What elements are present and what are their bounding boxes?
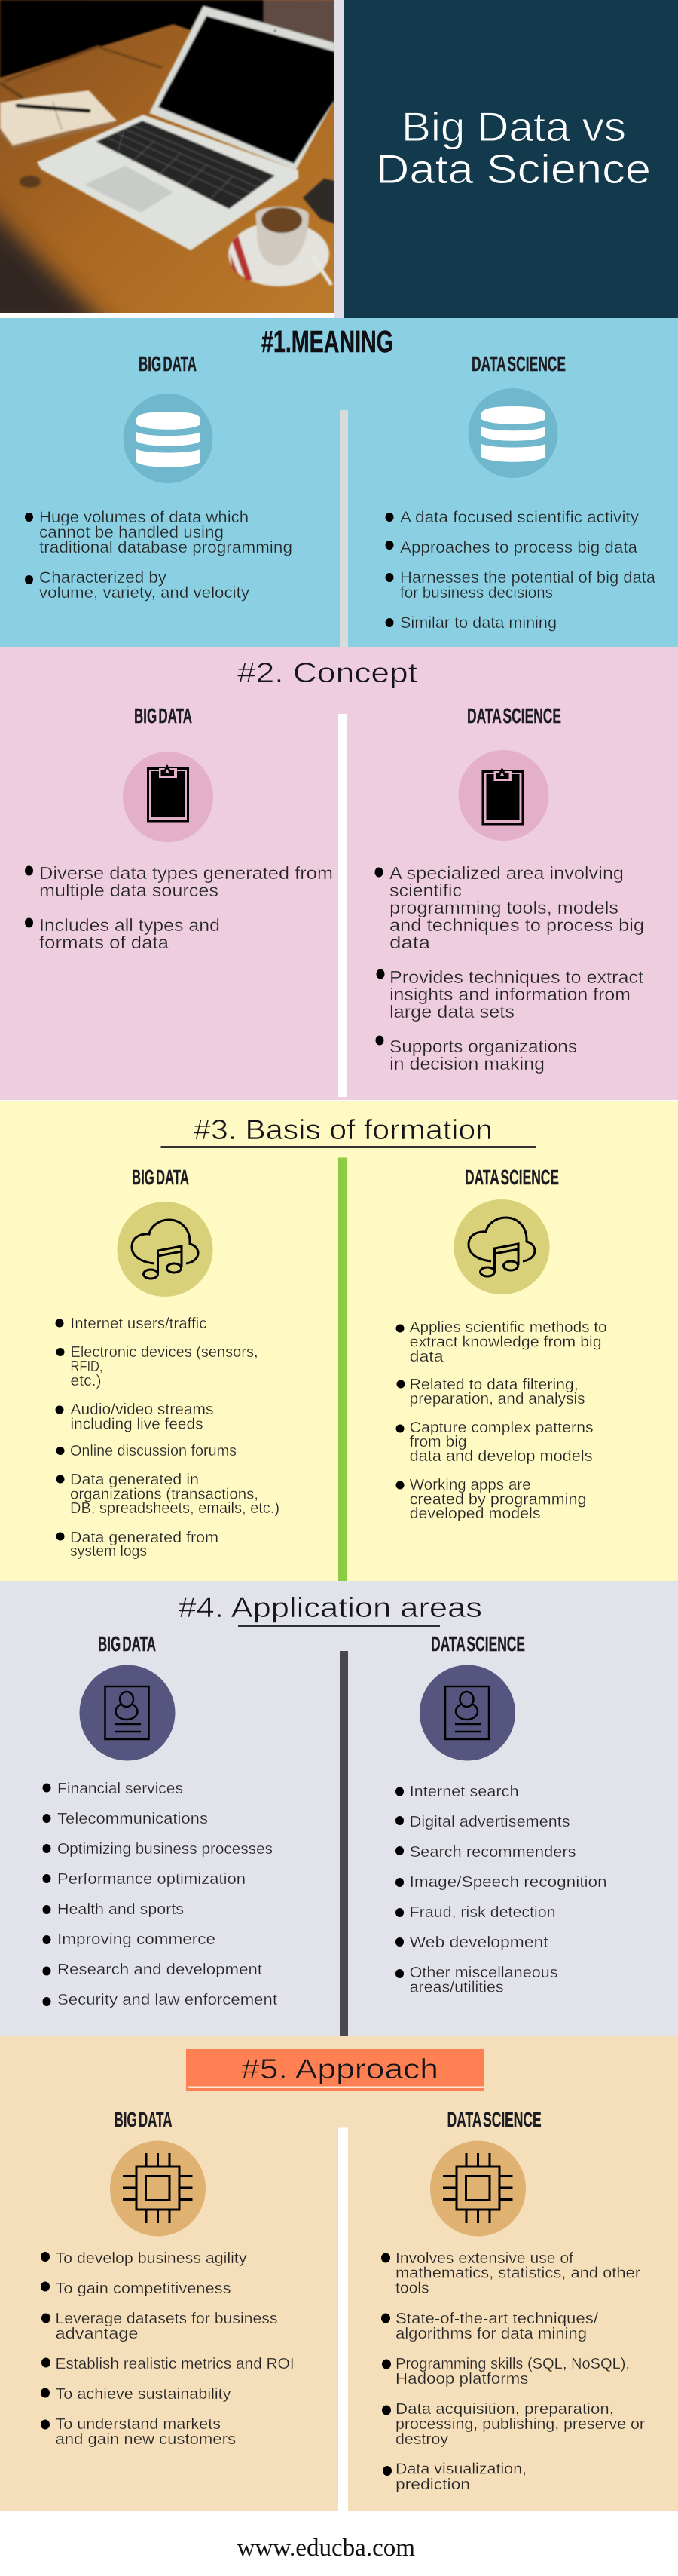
panel: #3 basis of formation — [0, 1101, 678, 1581]
icon: cloud with music note, big data — [118, 1202, 212, 1297]
icon: microchip, big data — [110, 2141, 206, 2236]
divider — [338, 714, 347, 1097]
bullet list: data science formation: developed models — [410, 1505, 541, 1522]
bullet list: big data concept — [25, 863, 333, 952]
bullet list: data science approach: State-of-the-art techniques/ — [396, 2311, 598, 2327]
bullet list: big data approach: Leverage datasets for business — [56, 2311, 277, 2327]
header photo: laptop on wooden desk — [0, 0, 334, 332]
bullet list: big data formation: system logs — [70, 1543, 147, 1560]
bullet list: data science formation: Related to data filtering, — [410, 1377, 579, 1393]
bullet list: data science applications: Digital advertisements — [410, 1814, 570, 1830]
bullet list: big data formation: including live feeds — [71, 1416, 203, 1432]
bullet list: data science approach: algorithms for data mining — [396, 2326, 587, 2342]
bullet list: data science formation — [396, 1319, 607, 1522]
icon: open notebook — [0, 90, 117, 149]
bullet list: data science concept — [375, 863, 644, 1074]
bullet list: data science approach: Involves extensive use of — [396, 2250, 573, 2267]
bullet list: data science approach: mathematics, statistics, and other — [396, 2265, 640, 2281]
column heading: big data: BIG DATA — [134, 704, 192, 727]
icon: cloud with music note, data science — [454, 1199, 550, 1294]
bullet list: big data approach: To develop business agility — [56, 2250, 247, 2267]
bullet list: data science approach: Data visualization, — [396, 2461, 527, 2477]
bullet list: big data formation: Audio/video streams — [71, 1401, 214, 1418]
bullet list: data science approach: prediction — [396, 2476, 470, 2493]
bullet list: big data concept: multiple data sources — [39, 881, 218, 900]
bullet list: data science approach — [381, 2250, 645, 2493]
bullet list: big data meaning: Characterized by — [39, 568, 166, 587]
bullet list: data science concept: large data sets — [389, 1002, 515, 1022]
bullet list: big data approach — [41, 2250, 294, 2448]
column heading: big data: BIG DATA — [139, 352, 197, 375]
heading underline — [161, 1146, 536, 1148]
bullet list: big data applications: Financial services — [57, 1781, 183, 1797]
title: Big Data vs — [402, 103, 626, 150]
bullet list: data science concept: insights and information from — [389, 985, 631, 1004]
bullet list: big data concept: Includes all types and — [39, 915, 220, 935]
bullet list: data science approach: processing, publishing, preserve or — [396, 2416, 645, 2433]
bullet list: big data approach: To gain competitiveness — [56, 2280, 231, 2297]
bullet list: big data approach: Establish realistic metrics and ROI — [56, 2356, 294, 2372]
bullet list: big data applications: Optimizing business processes — [57, 1841, 273, 1858]
bullet list: big data meaning: traditional database programming — [39, 538, 292, 556]
bullet list: data science concept: Provides techniques to extract — [389, 967, 644, 987]
divider — [340, 1651, 348, 2036]
bullet list: data science meaning: Similar to data mining — [400, 614, 557, 632]
bullet list: big data meaning: cannot be handled using — [39, 523, 224, 541]
bullet list: data science formation: Working apps are — [410, 1477, 531, 1493]
bullet list: data science concept: programming tools, models — [389, 898, 618, 917]
icon: microchip, data science — [430, 2141, 526, 2236]
bullet list: big data formation: Electronic devices (sensors, — [71, 1344, 258, 1361]
icon: phone — [303, 179, 334, 224]
bullet list: data science meaning — [386, 508, 655, 632]
bullet list: big data applications: Performance optimization — [57, 1871, 246, 1888]
icon: laptop — [37, 6, 334, 250]
column heading: data science: DATA SCIENCE — [467, 704, 561, 727]
bullet list: big data approach: advantage — [56, 2326, 139, 2342]
column heading: data science: DATA SCIENCE — [472, 352, 566, 375]
bullet list: big data meaning: Huge volumes of data which — [39, 508, 249, 526]
bullet list: big data formation: organizations (transactions, — [70, 1487, 258, 1503]
bullet list: data science formation: extract knowledge from big — [410, 1334, 602, 1351]
photo divider strip — [334, 0, 344, 318]
bullet list: big data formation: Internet users/traffic — [71, 1316, 206, 1332]
column heading: big data: BIG DATA — [132, 1165, 189, 1189]
icon: database, big data — [124, 394, 212, 483]
column heading: data science: DATA SCIENCE — [447, 2108, 542, 2131]
bullet list: data science formation: Applies scientific methods to — [410, 1319, 607, 1336]
divider — [338, 2127, 348, 2512]
bullet list: data science approach: destroy — [396, 2431, 448, 2448]
bullet list: data science meaning: Approaches to process big data — [400, 538, 637, 556]
bullet list: big data applications: Research and development — [57, 1962, 262, 1978]
bullet list: data science applications: Fraud, risk detection — [410, 1904, 556, 1921]
bullet list: data science approach: tools — [396, 2280, 429, 2296]
bullet list: data science concept: scientific — [389, 881, 462, 900]
bullet list: data science approach: Hadoop platforms — [396, 2371, 529, 2388]
divider — [340, 410, 348, 651]
bullet list: data science formation: created by programming — [410, 1491, 587, 1508]
bullet list: big data concept: Diverse data types generated from — [39, 863, 333, 883]
bullet list: big data concept: formats of data — [39, 933, 169, 952]
panel: #2 concept — [0, 647, 678, 1100]
panel: #1 meaning — [0, 318, 678, 651]
heading: #5. Approach: #5. Approach — [241, 2054, 438, 2084]
bullet list: data science meaning: Harnesses the potential of big data — [400, 568, 655, 587]
bullet list: data science applications: Other miscellaneous — [410, 1965, 558, 1981]
heading banner — [186, 2049, 484, 2091]
bullet list: big data formation: RFID, — [71, 1358, 102, 1375]
bullet list: data science applications — [396, 1784, 607, 1996]
bullet list: data science approach: Data acquisition, preparation, — [396, 2401, 614, 2418]
bullet list: data science concept: Supports organizations — [389, 1037, 577, 1056]
bullet list: data science concept: A specialized area involving — [389, 863, 624, 883]
column heading: big data: BIG DATA — [98, 1632, 156, 1656]
bullet list: big data applications: Health and sports — [57, 1901, 184, 1918]
bullet list: data science meaning: for business decisions — [400, 584, 553, 602]
title: Data Science — [376, 145, 651, 192]
bullet list: big data applications: Telecommunications — [57, 1811, 208, 1827]
column heading: big data: BIG DATA — [115, 2108, 172, 2131]
bullet list: big data applications: Improving commerce — [57, 1931, 215, 1948]
column heading: data science: DATA SCIENCE — [465, 1165, 559, 1189]
icon: clipboard, big data — [123, 752, 213, 842]
bullet list: data science formation: preparation, and analysis — [410, 1391, 585, 1407]
title panel — [344, 0, 678, 318]
icon: coffee cup on saucer — [228, 207, 331, 286]
bullet list: big data applications — [42, 1781, 277, 2008]
heading: #4. Application areas: #4. Application areas — [178, 1592, 482, 1623]
bullet list: data science concept: in decision making — [389, 1054, 545, 1074]
bullet list: data science applications: Image/Speech recognition — [410, 1874, 607, 1891]
bullet list: data science applications: Search recommenders — [410, 1844, 576, 1861]
bullet list: big data formation — [56, 1316, 279, 1560]
bullet list: data science concept: and techniques to process big — [389, 915, 644, 935]
title — [376, 103, 651, 192]
heading: #1. Meaning: #1.MEANING — [261, 324, 393, 359]
icon: profile card, big data — [80, 1665, 175, 1761]
bullet list: big data applications: Security and law enforcement — [57, 1992, 277, 2008]
bullet list: data science approach: Programming skills (SQL, NoSQL), — [396, 2356, 630, 2372]
bullet list: big data meaning: volume, variety, and velocity — [39, 584, 249, 602]
bullet list: big data meaning — [25, 508, 292, 602]
icon: database, data science — [469, 388, 557, 478]
bullet list: data science formation: from big — [410, 1434, 467, 1450]
bullet list: data science formation: data and develop models — [410, 1448, 593, 1465]
bullet list: data science formation: data — [410, 1349, 444, 1365]
icon: clipboard, data science — [458, 750, 548, 841]
bullet list: data science formation: Capture complex patterns — [410, 1420, 594, 1436]
icon: profile card, data science — [420, 1665, 515, 1761]
bullet list: big data formation: Data generated in — [70, 1472, 199, 1488]
heading underline — [238, 1625, 440, 1627]
heading: #2. Concept: #2. Concept — [237, 657, 418, 688]
bullet list: big data formation: Data generated from — [70, 1530, 218, 1546]
bullet list: big data approach: To achieve sustainability — [56, 2386, 231, 2403]
bullet list: data science applications: areas/utilities — [410, 1980, 504, 1996]
bullet list: big data formation: DB, spreadsheets, emails, etc.) — [70, 1500, 279, 1517]
bullet list: data science concept: data — [389, 933, 430, 952]
bullet list: big data formation: etc.) — [71, 1373, 101, 1389]
footer: website: www.educba.com — [237, 2535, 415, 2562]
column heading: data science: DATA SCIENCE — [431, 1632, 525, 1656]
panel: #4 application areas — [0, 1581, 678, 2036]
panel: #5 approach — [0, 2036, 678, 2512]
heading: #3. Basis of formation: #3. Basis of formation — [194, 1114, 493, 1145]
bullet list: data science applications: Internet search — [410, 1784, 519, 1800]
bullet list: big data formation: Online discussion forums — [70, 1443, 237, 1460]
divider — [338, 1158, 347, 1581]
bullet list: data science meaning: A data focused scientific activity — [400, 508, 639, 526]
bullet list: big data approach: To understand markets — [56, 2416, 221, 2433]
bullet list: data science applications: Web development — [410, 1934, 548, 1951]
bullet list: big data approach: and gain new customers — [56, 2431, 236, 2448]
